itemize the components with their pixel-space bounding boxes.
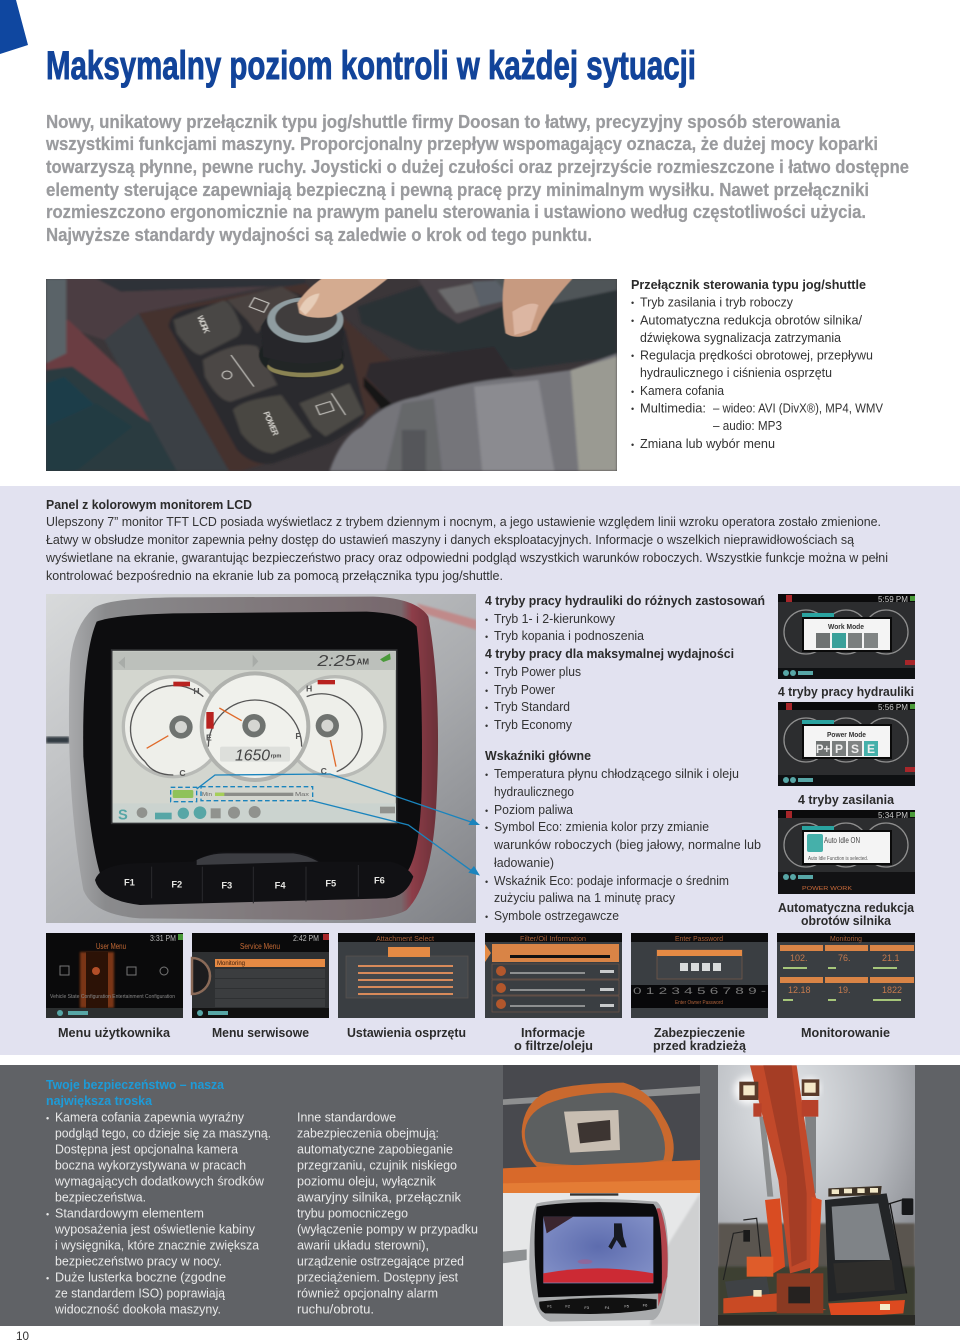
photo: LCD monitor with gauges: E	[206, 733, 212, 743]
photo: LCD monitor with gauges: Min	[202, 792, 212, 798]
list: hydraulic modes, power modes, main indicators: •	[485, 877, 488, 887]
list: hydraulic modes, power modes, main indicators	[485, 593, 765, 923]
photo: LCD monitor with gauges: F1	[124, 877, 135, 887]
list: hydraulic modes, power modes, main indicators: •	[485, 823, 488, 833]
list: hydraulic modes, power modes, main indicators: Wskaźniki główne	[485, 748, 591, 763]
photo: LCD monitor with gauges: F2	[171, 879, 182, 889]
photo: jog/shuttle controller: POWER	[261, 410, 281, 437]
thumbnail: auto idle screen: 5:34 PM	[878, 811, 908, 820]
safety list column 1: podgląd tego, co dzieje się za maszyną.	[55, 1126, 271, 1140]
photo: LCD monitor with gauges: F5	[325, 879, 336, 889]
feature list: jog/shuttle: •	[631, 298, 634, 308]
thumbnail: service menu: Service Menu	[240, 942, 280, 951]
safety list column 1: ze standardem ISO) poprawiają	[55, 1286, 226, 1300]
safety list column 1: widoczność dookoła maszyny.	[54, 1302, 221, 1316]
thumbnail: monitoring: Monitoring	[830, 934, 862, 943]
list: hydraulic modes, power modes, main indicators: Tryb kopania i podnoszenia	[494, 628, 645, 643]
arrows: callouts from monitor to indicator list	[171, 774, 480, 876]
safety text column 2: trybu pomocniczego	[297, 1206, 408, 1220]
list: hydraulic modes, power modes, main indicators: Temperatura płynu chłodzącego silnik i oleju	[494, 766, 739, 781]
list: hydraulic modes, power modes, main indicators: •	[485, 668, 488, 678]
intro paragraph: Nowy, unikatowy przełącznik typu jog/shuttle firmy Doosan to łatwy, precyzyjny sposób sterowania	[46, 112, 841, 132]
safety list column 1: Kamera cofania zapewnia wyraźny	[55, 1110, 244, 1124]
safety list column 1: Standardowym elementem	[55, 1206, 204, 1220]
thumbnail: attachment select: Attachment Select	[376, 934, 435, 943]
thumbnail: power mode screen: P+	[816, 742, 830, 756]
photo: LCD monitor with gauges: F4	[275, 880, 286, 890]
safety text column 2: awarii układu sterowni),	[297, 1238, 429, 1252]
safety list column 1: wymagających dodatkowych środków	[54, 1174, 265, 1188]
feature list: jog/shuttle: dźwiękowa sygnalizacja zatrzymania	[640, 330, 842, 345]
feature list: jog/shuttle: Przełącznik sterowania typu jog/shuttle	[631, 277, 866, 292]
safety text column 2	[297, 1110, 478, 1316]
feature list: jog/shuttle: •	[631, 404, 634, 414]
caption: filter and oil information: o filtrze/oleju	[514, 1038, 593, 1053]
safety text column 2: (wyłączenie pompy w przypadku	[297, 1222, 478, 1236]
list: hydraulic modes, power modes, main indicators: hydraulicznego	[494, 784, 574, 799]
panel text: LCD monitor: Panel z kolorowym monitorem LCD	[46, 497, 252, 512]
thumbnail: enter password: Enter Owner Password	[675, 1000, 723, 1006]
thumbnail: enter password: Enter Password	[675, 934, 723, 943]
intro paragraph: Najwyższe standardy wydajności są zaledwie o krok od tego punktu.	[46, 225, 592, 245]
photo: LCD monitor with gauges	[46, 594, 477, 923]
thumbnail: user menu	[46, 933, 183, 1018]
photo: camera view on monitor	[503, 1193, 700, 1326]
safety list column 1: bezpieczeństwo pracy w nocy.	[55, 1254, 222, 1268]
safety text column 2: zabezpieczenia obejmują:	[297, 1126, 439, 1140]
list: hydraulic modes, power modes, main indicators: •	[485, 770, 488, 780]
thumbnail: work mode screen	[778, 594, 915, 679]
safety list column 1: i wysięgnika, które znacznie zwiększa	[55, 1238, 260, 1252]
thumbnail: monitoring: 1822	[882, 985, 902, 995]
photo: LCD monitor with gauges: F6	[374, 875, 385, 885]
safety list column 1: •	[46, 1114, 49, 1124]
list: hydraulic modes, power modes, main indicators: Symbole ostrzegawcze	[494, 908, 619, 923]
list: hydraulic modes, power modes, main indicators: warunków roboczych (bieg jałowy, normalne lub	[493, 837, 761, 852]
thumbnail: user menu: 3:31 PM	[150, 934, 176, 943]
safety list column 1: bezpieczeństwa.	[55, 1190, 146, 1204]
heading: safety: Twoje bezpieczeństwo – nasza	[46, 1077, 225, 1092]
safety list column 1	[46, 1110, 271, 1316]
photo: LCD monitor with gauges: F3	[221, 881, 232, 891]
safety list column 1: •	[46, 1210, 49, 1220]
list: hydraulic modes, power modes, main indicators: •	[485, 703, 488, 713]
thumbnail: attachment select	[338, 933, 475, 1018]
caption: auto idle: obrotów silnika	[801, 913, 892, 928]
photo: camera view on monitor: F6	[643, 1303, 648, 1308]
thumbnail: monitoring: 102.	[790, 953, 808, 963]
photo: LCD monitor with gauges: 2:25	[316, 653, 356, 670]
feature list: jog/shuttle: •	[631, 387, 634, 397]
list: hydraulic modes, power modes, main indicators: •	[485, 686, 488, 696]
panel text: LCD monitor: wyświetlane na ekranie, gwarantując bezpieczeństwo pracy oraz odpowiedni podgląd wszystkich warunków roboczych. Wszystkie funkcje można w pełni	[45, 550, 888, 565]
thumbnail: auto idle screen	[778, 810, 915, 894]
list: hydraulic modes, power modes, main indicators: Symbol Eco: zmienia kolor przy zmianie	[494, 819, 709, 834]
thumbnail: power mode screen: E	[867, 742, 875, 756]
photo: LCD monitor with gauges: Max	[295, 792, 309, 798]
feature list: jog/shuttle: •	[631, 351, 634, 361]
caption: anti-theft	[653, 1025, 747, 1053]
safety text column 2: awaryjny silnika, przełącznik	[297, 1190, 462, 1204]
thumbnail: enter password	[631, 933, 768, 1018]
thumbnail: filter/oil information	[485, 933, 622, 1018]
photo: LCD monitor with gauges: F	[295, 731, 301, 741]
intro paragraph: rozmieszczono ergonomicznie na prawym panelu sterowania i ustawiono według częstotliwości użycia.	[46, 202, 866, 222]
feature list: jog/shuttle: •	[631, 316, 634, 326]
photo: LCD monitor with gauges: C	[179, 768, 186, 778]
feature list: jog/shuttle: hydraulicznego i ciśnienia osprzętu	[640, 365, 832, 380]
safety list column 1: Dostępna jest opcjonalna kamera	[55, 1142, 239, 1156]
thumbnail: user menu: Vehicle State Configuration Entertainment Configuration	[50, 994, 175, 1000]
thumbnail: monitoring: 76.	[838, 953, 851, 963]
feature list: jog/shuttle: Kamera cofania	[640, 383, 725, 398]
list: hydraulic modes, power modes, main indicators: •	[485, 912, 488, 922]
list: hydraulic modes, power modes, main indicators: •	[485, 721, 488, 731]
photo: rear camera	[503, 1065, 700, 1193]
feature list: jog/shuttle: •	[631, 440, 634, 450]
feature list: jog/shuttle: Zmiana lub wybór menu	[640, 436, 775, 451]
photo: LCD monitor with gauges: rpm	[271, 753, 281, 759]
caption: anti-theft: przed kradzieżą	[653, 1038, 747, 1053]
photo: camera view on monitor: F2	[565, 1304, 571, 1309]
photo: excavator with work lights	[718, 1065, 915, 1326]
feature list: jog/shuttle: – wideo: AVI (DivX®), MP4, WMV	[713, 400, 883, 416]
heading: safety: największa troska	[46, 1093, 153, 1108]
list: hydraulic modes, power modes, main indicators: Tryb Power	[494, 682, 556, 697]
thumbnail: auto idle screen: Auto Idle Function is selected.	[808, 856, 868, 862]
intro paragraph: elementy sterujące zapewniają bezpieczną i pewną pracę przy minimalnym wysiłku. Nawet przełączniki	[46, 180, 869, 200]
safety text column 2: Inne standardowe	[297, 1110, 396, 1124]
thumbnail: service menu	[192, 933, 329, 1018]
panel text: LCD monitor: Ulepszony 7” monitor TFT LCD posiada wyświetlacz z trybem dziennym i nocnym, a jego ustawienie względem linii wzroku operatora zostało zmienione.	[46, 514, 881, 529]
list: hydraulic modes, power modes, main indicators: Tryb Power plus	[494, 664, 581, 679]
thumbnail: power mode screen	[778, 702, 915, 786]
safety list column 1: Duże lusterka boczne (zgodne	[55, 1270, 226, 1284]
list: hydraulic modes, power modes, main indicators: •	[485, 632, 488, 642]
list: hydraulic modes, power modes, main indicators: 4 tryby pracy dla maksymalnej wydajności	[485, 646, 734, 661]
feature list: jog/shuttle: – audio: MP3	[713, 418, 782, 433]
caption: hydraulic modes: 4 tryby pracy hydrauliki	[778, 684, 914, 699]
list: hydraulic modes, power modes, main indicators: •	[485, 806, 488, 816]
caption: filter and oil information	[514, 1025, 593, 1053]
photo: jog/shuttle controller	[46, 279, 617, 471]
safety text column 2: poziomu oleju, wyłącznik	[297, 1174, 436, 1188]
thumbnail: enter password: 0 1 2 3 4 5 6 7 8 9 -	[633, 986, 766, 996]
safety list column 1: boczna wykorzystywana w pracach	[55, 1158, 246, 1172]
thumbnail: power mode screen: P	[835, 742, 843, 756]
caption: attachment settings: Ustawienia osprzętu	[347, 1025, 466, 1040]
caption: service menu: Menu serwisowe	[212, 1025, 309, 1040]
photo: camera view on monitor: F5	[624, 1304, 630, 1309]
photo: LCD monitor with gauges: S	[118, 807, 128, 823]
photo: LCD monitor with gauges: H	[306, 684, 312, 694]
safety text column 2: przegrzaniu, czujnik niskiego	[297, 1158, 457, 1172]
intro paragraph: towarzyszą płynne, pewne ruchy. Joysticki o dużej czułości oraz przejrzyście rozmieszczone i łatwo dostępne	[46, 157, 909, 177]
safety text column 2: ruchu/obrotu.	[297, 1302, 374, 1316]
feature list: jog/shuttle: Automatyczna redukcja obrotów silnika/	[640, 312, 862, 328]
thumbnail: monitoring	[777, 933, 915, 1018]
thumbnail: monitoring: 19.	[838, 985, 851, 995]
thumbnail: monitoring: 21.1	[882, 953, 900, 963]
list: hydraulic modes, power modes, main indicators: zużyciu paliwa na 1 minutę pracy	[494, 890, 675, 905]
list: hydraulic modes, power modes, main indicators: Tryb Standard	[494, 699, 570, 714]
list: hydraulic modes, power modes, main indicators: Tryb Economy	[494, 717, 572, 732]
list: hydraulic modes, power modes, main indicators: Poziom paliwa	[494, 802, 574, 817]
photo: LCD monitor with gauges: AM	[357, 658, 369, 667]
photo: LCD monitor with gauges: C	[321, 766, 328, 776]
panel text: LCD monitor: kontrolować bezpośrednio na ekranie lub za pomocą przełącznika typu jog/shuttle.	[46, 568, 503, 583]
intro paragraph: wszystkimi funkcjami maszyny. Proporcjonalny przepływ wspomagający oznacza, że dużej mocy koparki	[45, 134, 878, 154]
caption: auto idle	[778, 900, 915, 928]
panel text: LCD monitor: Łatwy w obsłudze monitor zapewnia pełny dostęp do ustawień maszyny i danych eksploatacyjnych. Informacje o wszelkich nieprawidłowościach są	[46, 532, 855, 547]
caption: monitoring: Monitorowanie	[801, 1025, 890, 1040]
panel: safety background	[0, 1065, 960, 1326]
photo: jog/shuttle controller: WORK	[195, 315, 212, 335]
panel: LCD monitor background	[0, 486, 960, 1055]
feature list: jog/shuttle: Regulacja prędkości obrotowej, przepływu	[640, 348, 873, 362]
safety text column 2: przeciążeniem. Dostępny jest	[297, 1270, 458, 1284]
thumbnail: monitoring: 12.18	[788, 985, 811, 995]
list: hydraulic modes, power modes, main indicators: ładowanie)	[494, 855, 554, 870]
thumbnail: auto idle screen: POWER WORK	[802, 886, 853, 892]
safety list column 1: •	[46, 1274, 49, 1284]
feature list: jog/shuttle: Tryb zasilania i tryb roboczy	[640, 294, 793, 310]
photo: LCD monitor with gauges: 1650	[235, 748, 270, 765]
list: hydraulic modes, power modes, main indicators: 4 tryby pracy hydrauliki do różnych zastosowań	[485, 593, 765, 608]
thumbnail: service menu: 2:42 PM	[293, 934, 319, 943]
thumbnail: filter/oil information: Filter/Oil Information	[520, 934, 586, 943]
thumbnail: work mode screen: Work Mode	[828, 622, 864, 631]
safety text column 2: urządzenie ostrzegające przed	[297, 1254, 464, 1268]
feature list: jog/shuttle: Multimedia:	[640, 400, 706, 416]
feature list: jog/shuttle	[631, 277, 883, 451]
safety text column 2: również opcjonalny alarm	[297, 1286, 438, 1300]
title: Maksymalny poziom kontroli w każdej sytuacji	[46, 44, 696, 88]
list: hydraulic modes, power modes, main indicators: Wskaźnik Eco: podaje informacje o średnim	[494, 873, 729, 888]
photo: LCD monitor with gauges: H	[193, 686, 200, 696]
safety text column 2: automatyczne zapobieganie	[297, 1142, 453, 1156]
thumbnail: work mode screen: 5:59 PM	[878, 595, 908, 604]
intro paragraph	[45, 112, 909, 245]
photo: camera view on monitor: F4	[605, 1305, 610, 1310]
photo: camera view on monitor: F3	[584, 1305, 590, 1310]
corner tab: blue page marker	[0, 0, 28, 54]
thumbnail: power mode screen: Power Mode	[827, 730, 866, 739]
list: hydraulic modes, power modes, main indicators: Tryb 1- i 2-kierunkowy	[494, 611, 615, 626]
list: hydraulic modes, power modes, main indicators: •	[485, 615, 488, 625]
thumbnail: user menu: User Menu	[96, 942, 126, 951]
caption: auto idle: Automatyczna redukcja	[778, 900, 915, 915]
caption: user menu: Menu użytkownika	[58, 1025, 171, 1040]
safety list column 1: wyposażenia jest oświetlenie kabiny	[54, 1222, 255, 1236]
caption: power modes: 4 tryby zasilania	[798, 792, 895, 807]
photo: camera view on monitor: F1	[547, 1304, 553, 1309]
heading: safety	[46, 1077, 225, 1108]
thumbnail: auto idle screen: Auto Idle ON	[824, 836, 860, 845]
panel text: LCD monitor	[45, 497, 888, 583]
thumbnail: power mode screen: S	[851, 742, 859, 756]
thumbnail: power mode screen: 5:56 PM	[878, 703, 908, 712]
caption: anti-theft: Zabezpieczenie	[654, 1025, 745, 1040]
caption: filter and oil information: Informacje	[521, 1025, 585, 1040]
thumbnail: service menu: Monitoring	[217, 961, 245, 967]
